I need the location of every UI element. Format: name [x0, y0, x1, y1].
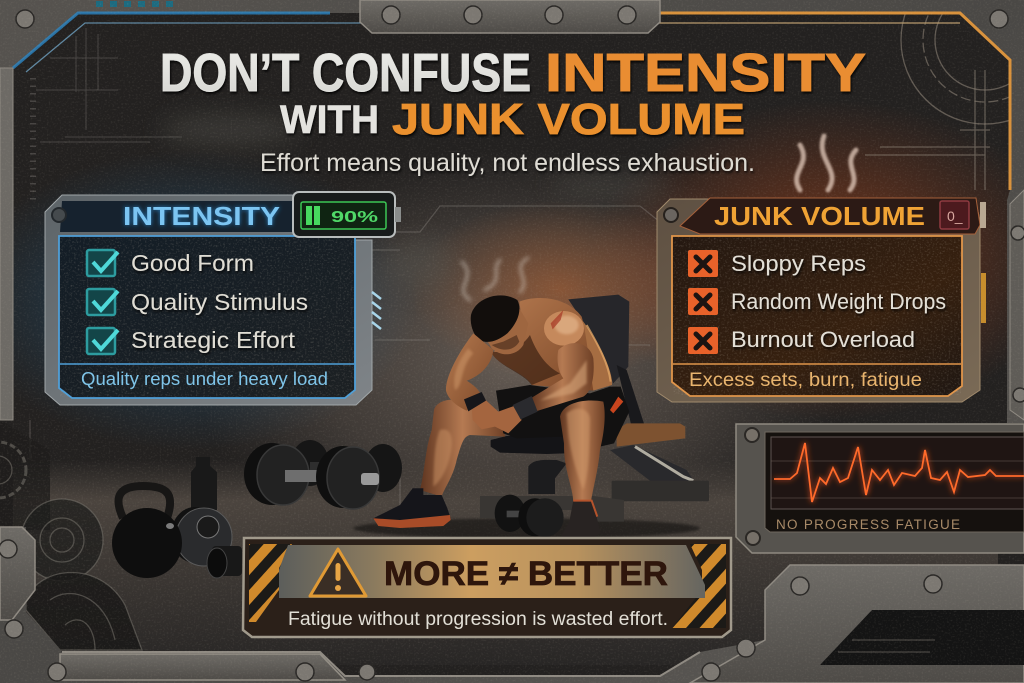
far knee highlight	[567, 409, 590, 490]
far wristband	[513, 396, 538, 419]
frame: orange edge glow	[640, 13, 1010, 190]
gym floor	[13, 460, 998, 665]
bench front pad	[491, 436, 565, 454]
near arm highlight	[454, 348, 473, 390]
empty battery	[940, 201, 986, 229]
small dumbbell	[207, 546, 242, 578]
back rim light	[587, 325, 611, 382]
far leg	[560, 400, 605, 503]
bottom left rail	[60, 654, 345, 680]
near arm	[446, 333, 493, 411]
heading: INTENSITY	[123, 201, 280, 231]
check item: good form: Good Form	[131, 250, 254, 276]
frame: bottom highlight	[62, 652, 700, 676]
face shadow	[492, 335, 519, 350]
panel inner screen	[59, 236, 355, 398]
panel: intensity	[45, 186, 401, 405]
check item: good form	[87, 250, 254, 276]
warning triangle	[310, 549, 366, 596]
left side rail	[0, 68, 13, 420]
frame: inner orange line	[640, 22, 960, 24]
rivet	[664, 208, 678, 222]
shoulder highlight	[555, 316, 579, 334]
panel frame	[45, 195, 372, 405]
steam above athlete	[462, 258, 528, 300]
grid lines	[771, 461, 1024, 498]
blueprint gear top right	[865, 0, 1024, 190]
cross item: sloppy reps: Sloppy Reps	[731, 251, 866, 276]
hazard ticks	[981, 273, 986, 323]
panel inner screen	[672, 236, 962, 396]
title line one orange: INTENSITY	[545, 43, 866, 103]
steam above junk panel	[797, 136, 856, 190]
kettlebell	[112, 486, 182, 578]
hazard stripes right	[672, 544, 726, 628]
warning banner	[243, 538, 731, 637]
panel header	[680, 198, 980, 234]
cross item: sloppy reps	[688, 250, 866, 277]
blueprint gears lower left	[0, 420, 142, 650]
back and lat	[573, 310, 612, 391]
bench back pad	[568, 295, 629, 383]
near wristband	[464, 392, 486, 411]
monitor chart area	[771, 437, 1024, 509]
footer divider	[673, 363, 961, 365]
top left hazard ticks	[96, 1, 176, 7]
glow behind athlete	[410, 200, 710, 380]
chevron marks	[372, 292, 381, 329]
athlete on bench	[353, 295, 709, 538]
ECG trace	[774, 443, 1024, 502]
title line two white: WITH	[280, 98, 379, 142]
bottom left plate	[0, 527, 35, 620]
circuit lines	[30, 206, 660, 520]
central wall light	[190, 150, 850, 570]
bench seat	[617, 423, 685, 447]
footer text: Excess sets, burn, fatigue	[689, 370, 922, 391]
cross item: random weight drops: Random Weight Drops	[731, 289, 946, 314]
panel frame	[657, 199, 980, 402]
blue outer glow line	[78, 184, 280, 188]
glow behind intensity panel	[0, 150, 420, 450]
title line one white: DON’T CONFUSE	[160, 43, 531, 103]
bench post	[528, 460, 567, 494]
shorts	[496, 385, 629, 447]
shoulder	[544, 311, 584, 346]
head	[486, 307, 528, 354]
battery 90%	[293, 192, 401, 237]
vent lines	[838, 640, 935, 652]
back dumbbell	[291, 440, 402, 492]
chest shadow	[492, 335, 560, 385]
check item: quality stimulus: Quality Stimulus	[131, 289, 308, 315]
wall blotches	[160, 114, 670, 290]
far shoe accent	[573, 501, 597, 517]
panel texture	[60, 237, 354, 397]
footer text: Quality reps under heavy load	[81, 369, 328, 389]
top centre plate	[360, 0, 660, 33]
hazard stripes left	[249, 544, 292, 622]
banner frame	[243, 538, 731, 637]
near leg	[420, 400, 505, 497]
bench leg highlight	[635, 447, 693, 481]
rivet lower	[746, 531, 760, 545]
monitor label: NO PROGRESS FATIGUE	[776, 517, 960, 532]
forearm highlight	[540, 360, 587, 401]
monitor screen	[765, 432, 1024, 532]
gym weights left	[112, 440, 402, 578]
bench rear base	[612, 481, 709, 501]
empty battery: 0_	[947, 208, 963, 224]
rivet	[52, 208, 66, 222]
frame: inner blue line	[26, 23, 400, 72]
weight plate stack	[171, 507, 232, 566]
near shoe sole	[373, 515, 451, 528]
title	[160, 43, 866, 144]
dumbbell under bench	[495, 495, 564, 537]
glow behind junk volume panel	[590, 100, 1024, 420]
subtitle: Effort means quality, not endless exhaustion.	[260, 149, 755, 177]
torso	[492, 298, 593, 391]
banner light plate	[279, 545, 705, 598]
title line two orange: JUNK VOLUME	[392, 95, 745, 144]
far arm	[531, 343, 594, 412]
footer divider	[60, 363, 354, 365]
frame: blue edge glow	[13, 13, 330, 68]
monitor casing	[736, 424, 1024, 553]
blueprint lines top left	[33, 28, 182, 200]
hands	[472, 399, 522, 433]
shoulder scratch	[551, 310, 563, 329]
hair	[471, 295, 519, 342]
check item: strategic effort: Strategic Effort	[131, 327, 296, 353]
bench front base	[480, 496, 624, 522]
near calf highlight	[433, 429, 452, 487]
bench leg	[610, 445, 693, 483]
shorts accent	[610, 397, 623, 413]
water bottle	[191, 457, 217, 510]
monitor: no progress fatigue	[736, 424, 1024, 553]
banner headline: MORE ≠ BETTER	[384, 555, 668, 593]
front dumbbell	[244, 443, 379, 509]
heading: JUNK VOLUME	[714, 201, 925, 231]
orange outer glow line	[720, 185, 950, 187]
floor shadow	[353, 518, 700, 538]
bottom right vent	[820, 610, 1024, 665]
battery 90%: 90%	[331, 209, 378, 226]
right side rail	[1010, 190, 1024, 420]
panel texture	[673, 237, 961, 395]
banner subtext: Fatigue without progression is wasted effort.	[288, 609, 668, 630]
panel: junk volume	[657, 186, 986, 402]
near shoe	[373, 488, 451, 527]
bottom right plate	[690, 565, 1024, 683]
bench	[480, 295, 709, 522]
bench strut	[617, 365, 645, 427]
far shoe	[562, 501, 601, 538]
rivets	[745, 428, 759, 442]
cross item: burnout overload: Burnout Overload	[731, 327, 915, 352]
panel header	[60, 201, 295, 232]
